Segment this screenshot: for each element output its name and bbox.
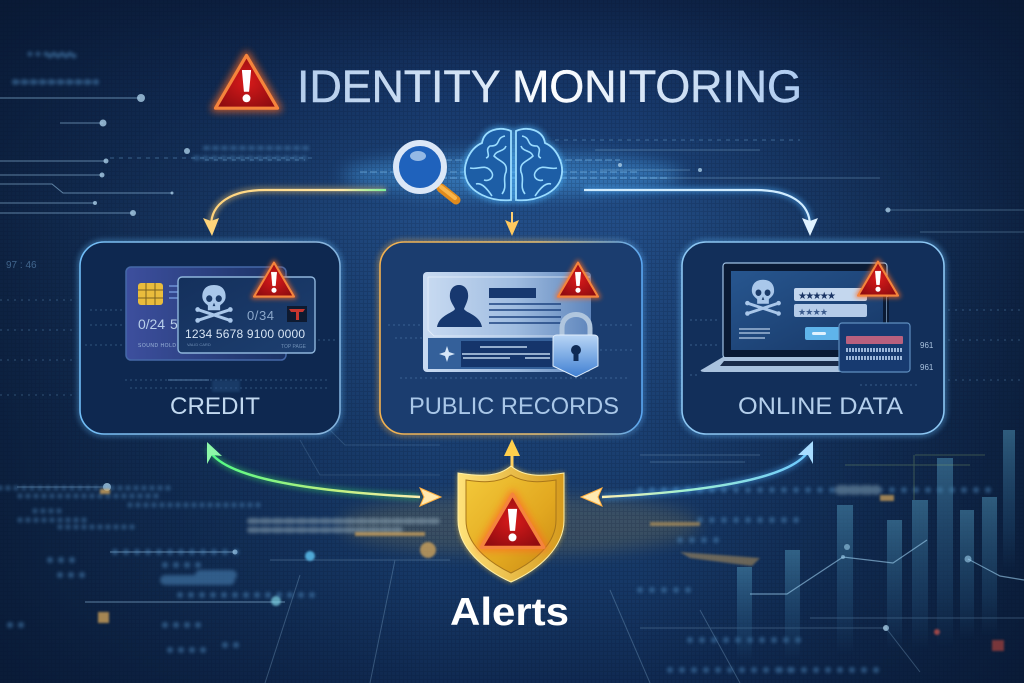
icon: padlock bbox=[553, 314, 598, 377]
arrow: brain to credit bbox=[203, 190, 386, 236]
icon: shield warning bbox=[480, 493, 545, 548]
credit card: back: 0/24 bbox=[138, 316, 165, 332]
chip bbox=[138, 283, 163, 305]
credit card: front bbox=[178, 277, 315, 353]
label: online data: ONLINE DATA bbox=[738, 393, 904, 420]
login fields bbox=[739, 288, 867, 340]
panel: public records bbox=[380, 242, 642, 434]
background: glow streaks around brain bbox=[0, 140, 1024, 395]
credit card: front: 1234 5678 9100 0000 bbox=[185, 327, 305, 341]
heading: IDENTITY MONITORING bbox=[297, 61, 802, 112]
icon: skull bbox=[745, 280, 781, 316]
panel: online data: 961 bbox=[920, 341, 934, 350]
icon: skull and crossbones bbox=[195, 285, 233, 323]
icon: brain bbox=[465, 129, 562, 200]
label: alerts: Alerts bbox=[450, 591, 569, 634]
credit card: back: SOUND HOLD bbox=[138, 343, 176, 349]
arrow: online data to alerts bbox=[581, 441, 813, 506]
icon: online data warning bbox=[857, 261, 899, 296]
icon: credit warning bbox=[253, 262, 295, 297]
login fields: ★★★★★ bbox=[798, 291, 836, 302]
panel: online data: 961 bbox=[920, 363, 934, 372]
credit card: front: TOP PAGE bbox=[281, 344, 307, 350]
popup window bbox=[839, 323, 910, 372]
panel: credit bbox=[80, 242, 340, 434]
panel: online data bbox=[682, 242, 944, 434]
label: credit: CREDIT bbox=[170, 393, 260, 420]
credit card: front: 0/34 bbox=[247, 308, 274, 323]
credit card: back: 5 bbox=[170, 316, 178, 332]
arrow: credit to alerts bbox=[207, 442, 441, 506]
icon: magnifying glass bbox=[396, 143, 456, 200]
id record card bbox=[423, 272, 591, 372]
credit card: front: VALID CARD bbox=[187, 342, 211, 347]
laptop bbox=[701, 263, 887, 372]
login fields: ★★★★ bbox=[798, 307, 828, 317]
arrow: brain to public records bbox=[505, 212, 519, 236]
credit card: back bbox=[126, 267, 286, 360]
icon: person silhouette bbox=[437, 285, 482, 327]
icon: alert shield bbox=[458, 466, 564, 582]
background: 97 : 46 bbox=[6, 260, 37, 271]
arrow: brain to online data bbox=[584, 190, 818, 236]
arrow: shield up to public records bbox=[504, 439, 520, 468]
icon: public records warning bbox=[557, 262, 599, 297]
title: warning icon and heading bbox=[214, 54, 802, 112]
label: public records: PUBLIC RECORDS bbox=[409, 393, 619, 420]
background: bar chart bbox=[737, 430, 1015, 662]
icon: title warning triangle bbox=[214, 54, 279, 109]
